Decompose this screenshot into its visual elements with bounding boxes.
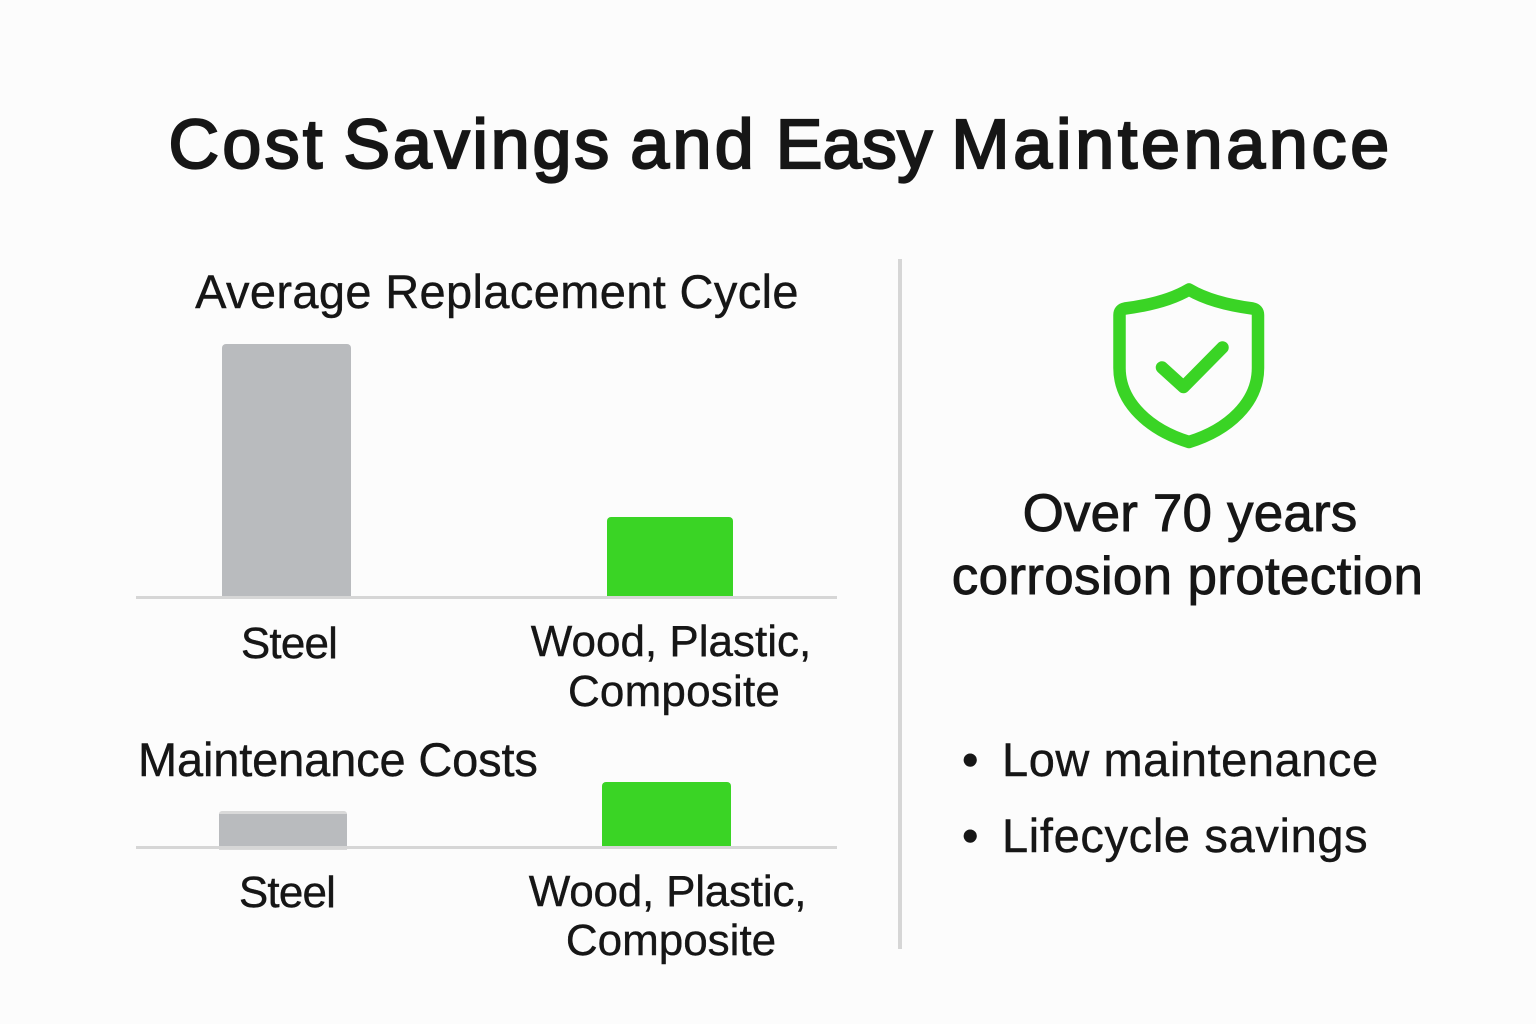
title: Easy	[776, 105, 933, 183]
bullet: low maintenance: Low maintenance	[1002, 733, 1379, 786]
icon: shield with check	[1113, 283, 1264, 448]
label: wood, plastic, composite: Composite	[566, 916, 776, 965]
label: wood, plastic, composite	[528, 867, 806, 965]
title: Savings	[343, 105, 612, 183]
bullet: lifecycle savings: Lifecycle savings	[1002, 809, 1368, 862]
callout: corrosion protection	[952, 484, 1423, 606]
bullet: low maintenance: •	[962, 733, 978, 786]
label: wood, plastic, composite: Wood, Plastic,	[531, 617, 811, 666]
title: Maintenance	[951, 105, 1393, 183]
title: Cost	[168, 105, 326, 183]
axis: replacement	[136, 596, 837, 599]
title: and	[630, 105, 757, 183]
bullet list	[962, 733, 1379, 862]
callout: corrosion protection: corrosion protection	[952, 547, 1423, 606]
bar: steel maintenance	[219, 811, 347, 850]
axis: maintenance	[136, 846, 837, 849]
label: wood, plastic, composite: Composite	[568, 667, 780, 716]
heading: maintenance costs: Maintenance Costs	[138, 733, 538, 786]
label: wood, plastic, composite	[530, 617, 811, 716]
callout: corrosion protection: Over 70 years	[1023, 484, 1357, 543]
bar: steel replacement	[222, 344, 351, 598]
heading: average replacement cycle: Average Replacement Cycle	[195, 265, 799, 318]
label: steel: Steel	[239, 868, 335, 917]
bar: wood replacement	[607, 517, 733, 597]
label: steel: Steel	[241, 619, 337, 668]
label: wood, plastic, composite: Wood, Plastic,	[529, 867, 806, 916]
bar: wood maintenance	[602, 782, 731, 847]
bullet: lifecycle savings: •	[962, 809, 978, 862]
title	[168, 105, 1393, 184]
divider	[898, 259, 902, 949]
